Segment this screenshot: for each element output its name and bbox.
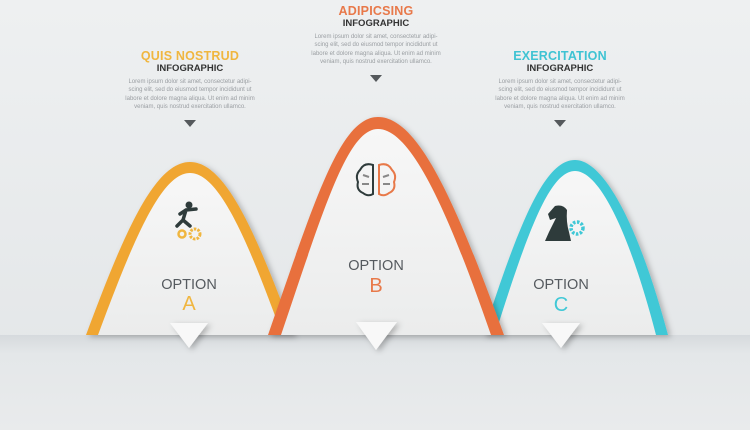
icon: brain	[357, 164, 395, 195]
text block: option A	[125, 49, 255, 127]
text block: option C	[495, 49, 625, 127]
pointer triangles	[170, 322, 580, 350]
text block: option B: scing elit, sed do eiusmod tempor incididunt ut	[314, 42, 438, 48]
label: option A	[161, 277, 217, 315]
text block: option A: INFOGRAPHIC	[157, 63, 223, 74]
text block: option B	[311, 4, 441, 82]
label: option A: OPTION	[161, 277, 217, 293]
text block: option B: labore et dolore magna aliqua. Ut enim ad minim	[311, 51, 441, 57]
ground band	[0, 335, 750, 430]
text block: option A: labore et dolore magna aliqua. Ut enim ad minim	[125, 96, 255, 102]
icon: runner with gears	[177, 202, 200, 239]
text block: option A: scing elit, sed do eiusmod tempor incididunt ut	[128, 87, 252, 93]
label: option B	[348, 258, 404, 297]
label: option A: A	[182, 293, 196, 315]
text block: option C: Lorem ipsum dolor sit amet, consectetur adipi-	[498, 79, 622, 85]
icon: chess knight	[545, 206, 583, 241]
label: option C	[533, 277, 589, 316]
arch A	[86, 162, 294, 335]
text block: option A: QUIS NOSTRUD	[141, 49, 239, 63]
text block: option B: ADIPICSING	[339, 4, 413, 18]
label: option C: OPTION	[533, 277, 589, 293]
label: option C: C	[554, 294, 568, 316]
arch C	[483, 160, 668, 335]
text block: option C: INFOGRAPHIC	[527, 63, 593, 74]
text block: option A: Lorem ipsum dolor sit amet, consectetur adipi-	[128, 79, 252, 85]
text block: option B: veniam, quis nostrud exercitation ullamco.	[320, 59, 432, 65]
label: option B: OPTION	[348, 258, 404, 274]
text block: option B: Lorem ipsum dolor sit amet, consectetur adipi-	[314, 34, 438, 40]
text block: option B: INFOGRAPHIC	[343, 18, 409, 29]
text block: option C: scing elit, sed do eiusmod tempor incididunt ut	[498, 87, 622, 93]
text block: option C: EXERCITATION	[513, 49, 607, 63]
label: option B: B	[369, 275, 383, 297]
arch B	[268, 117, 504, 335]
text block: option C: labore et dolore magna aliqua. Ut enim ad minim	[495, 96, 625, 102]
text block: option A: veniam, quis nostrud exercitation ullamco.	[134, 104, 246, 110]
text block: option C: veniam, quis nostrud exercitation ullamco.	[504, 104, 616, 110]
